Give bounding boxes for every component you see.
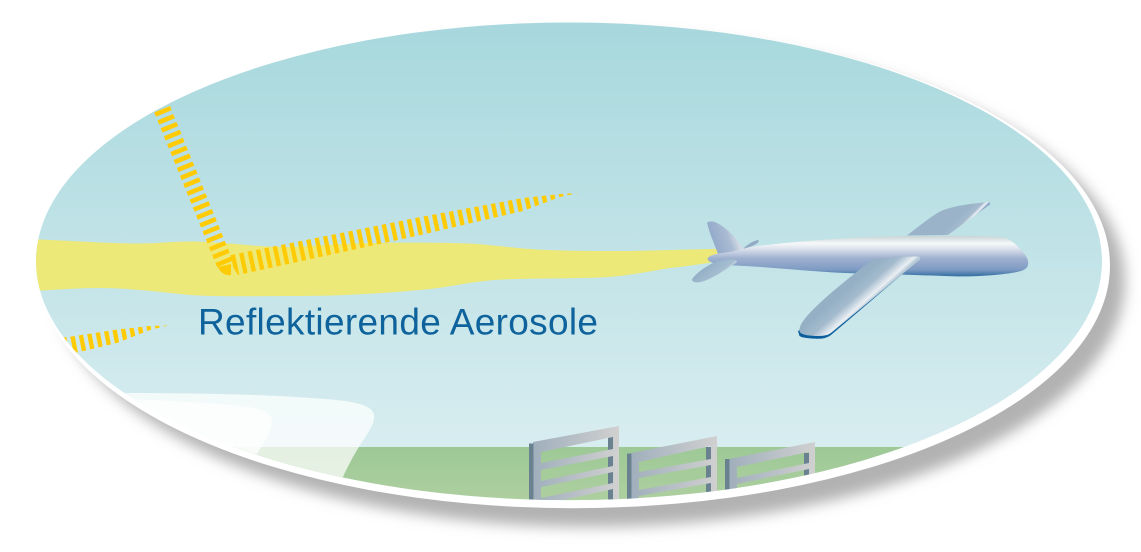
building 1 [529, 426, 619, 505]
airplane [692, 202, 1028, 339]
reflected sunlight ray: corner [218, 264, 231, 275]
cloud: large haze [125, 393, 374, 478]
ground [234, 447, 904, 500]
near stabilizer [692, 260, 737, 282]
fuselage [708, 236, 1028, 276]
cloud: small haze [135, 400, 272, 454]
near wing [799, 256, 920, 336]
aerosol plume [30, 239, 722, 296]
reflected sunlight ray: outgoing [233, 192, 578, 266]
near wing dark edge [798, 259, 920, 339]
tail fin [707, 221, 745, 254]
reflected sunlight ray: incoming [160, 104, 225, 264]
far stabilizer [744, 240, 759, 249]
building 3 [725, 442, 815, 490]
far wing [907, 202, 990, 236]
label: Reflektierende Aerosole: Reflektierende Aerosole [198, 302, 598, 342]
building 2 [627, 436, 717, 502]
reflected sunlight ray: lower left [64, 326, 168, 353]
